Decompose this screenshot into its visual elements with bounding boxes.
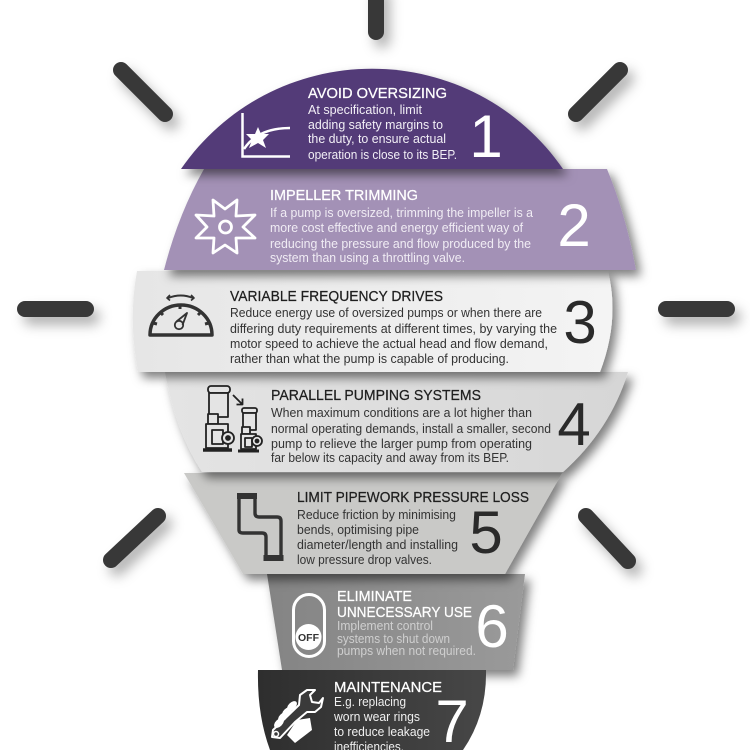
panel 3: variable frequency drives — [133, 271, 612, 372]
text 6: systems to shut down — [337, 631, 450, 646]
icon: two pumps — [203, 386, 262, 451]
text 3: motor speed to achieve the actual head and flow demand, — [230, 336, 548, 351]
heading 6 — [337, 588, 472, 621]
panel 1: avoid oversizing — [181, 69, 563, 170]
text 1: the duty, to ensure actual — [308, 131, 446, 146]
number 6: 6 — [475, 593, 509, 660]
number 5: 5 — [469, 499, 503, 566]
text 3: rather than what the pump is capable of producing. — [230, 351, 509, 366]
text 4: When maximum conditions are a lot higher than — [271, 405, 532, 420]
text 4: pump to relieve the larger pump from operating — [271, 436, 532, 451]
text 4: far below its capacity and away from its BEP. — [271, 450, 509, 465]
heading 7: MAINTENANCE — [334, 679, 442, 696]
text 6: Implement control — [337, 618, 433, 633]
text 1 — [308, 102, 457, 162]
number 1: 1 — [469, 103, 503, 170]
panel 7: maintenance — [258, 670, 486, 750]
text 2: reducing the pressure and flow produced by the — [270, 236, 531, 251]
text 2: more cost effective and energy efficient way of — [270, 220, 523, 235]
text 5 — [297, 507, 458, 567]
text 7: E.g. replacing — [334, 694, 406, 709]
icon: impeller — [196, 200, 255, 253]
text 2: system than using a throttling valve. — [270, 250, 465, 265]
icon: pipe — [237, 493, 284, 561]
text 3: Reduce energy use of oversized pumps or when there are — [230, 305, 542, 320]
text 5: Reduce friction by minimising — [297, 507, 456, 522]
text 5: diameter/length and installing — [297, 537, 458, 552]
icon: wrench in hand — [272, 690, 323, 743]
text 6 — [337, 618, 476, 658]
text 5: low pressure drop valves. — [297, 552, 432, 567]
text 2 — [270, 205, 534, 265]
heading 1: AVOID OVERSIZING — [308, 85, 447, 102]
text 2: If a pump is oversized, trimming the impeller is a — [270, 205, 534, 220]
text 6: pumps when not required. — [337, 643, 476, 658]
icon: off switch — [294, 594, 324, 656]
panel 4: parallel pumping systems — [165, 372, 628, 472]
heading 4: PARALLEL PUMPING SYSTEMS — [271, 387, 481, 404]
text 1: operation is close to its BEP. — [308, 147, 457, 162]
panel 5: limit pipework pressure loss — [184, 473, 562, 574]
light rays — [25, 0, 727, 561]
heading 6: UNNECESSARY USE — [337, 604, 472, 621]
text 4 — [271, 405, 551, 465]
text 3 — [230, 305, 557, 366]
number 2: 2 — [557, 192, 591, 259]
icon: gauge — [150, 295, 212, 335]
text 5: bends, optimising pipe — [297, 522, 419, 537]
text 4: normal operating demands, install a smaller, second — [271, 421, 551, 436]
heading 3: VARIABLE FREQUENCY DRIVES — [230, 288, 443, 305]
panel 6: eliminate unnecessary use — [267, 574, 525, 670]
number 3: 3 — [563, 289, 597, 356]
icon: pump curve with star — [242, 113, 290, 156]
text 7 — [333, 694, 430, 750]
number 4: 4 — [557, 391, 591, 458]
icon: off switch: OFF — [298, 632, 320, 644]
text 1: At specification, limit — [308, 102, 422, 117]
text 7: worn wear rings — [333, 709, 420, 724]
text 1: adding safety margins to — [308, 117, 443, 132]
heading 2: IMPELLER TRIMMING — [270, 187, 418, 204]
text 3: differing duty requirements at different times, by varying the — [230, 321, 557, 336]
heading 6: ELIMINATE — [337, 588, 412, 605]
heading 5: LIMIT PIPEWORK PRESSURE LOSS — [297, 489, 529, 506]
panel 2: impeller trimming — [164, 169, 636, 270]
text 7: to reduce leakage — [334, 724, 430, 739]
